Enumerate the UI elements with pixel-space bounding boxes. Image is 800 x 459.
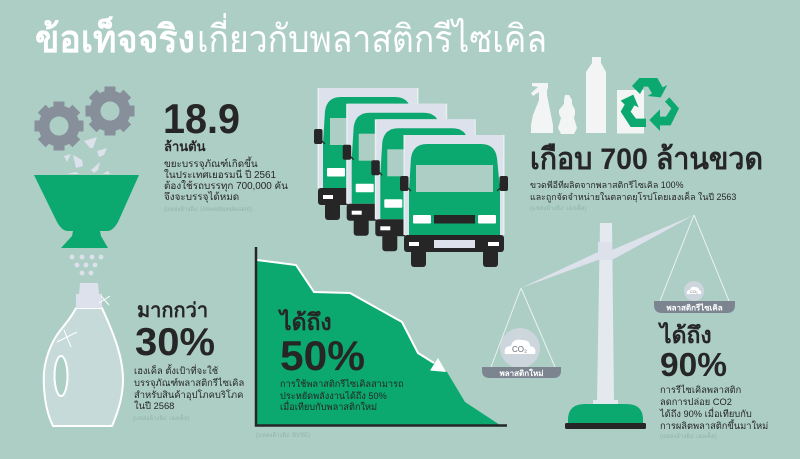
stat: up to 50%: เมื่อเทียบกับพลาสติกใหม่ xyxy=(280,400,377,412)
stat: up to 90%: (แหล่งอ้างอิง: เฮงเค็ล) xyxy=(660,431,717,440)
icon: balance scale xyxy=(482,215,735,429)
right pan: recycled plastic: พลาสติกรีไซเคิล xyxy=(666,302,723,312)
stat: up to 50%: การใช้พลาสติกรีไซเคิลสามารถ xyxy=(280,379,404,389)
stat: 18.9 million tons: ต้องใช้รถบรรทุก 700,000 คัน xyxy=(164,180,288,192)
left pan: new plastic: พลาสติกใหม่ xyxy=(499,368,544,378)
stat: up to 90%: ได้ถึง 90% เมื่อเทียบกับ xyxy=(659,407,752,419)
icon: falling pellets xyxy=(70,255,103,275)
icon: plastic flakes xyxy=(64,137,110,174)
stat: more than 30% xyxy=(133,300,244,422)
stat: more than 30%: มากกว่า xyxy=(137,300,208,322)
right pan: recycled plastic: CO₂ xyxy=(690,289,698,294)
stat: up to 50%: ประหยัดพลังงานได้ถึง 50% xyxy=(280,391,387,401)
stat: nearly 700 million bottles: เกือบ 700 ล้านขวด xyxy=(530,143,763,176)
stat: 18.9 million tons: 18.9 xyxy=(163,95,240,142)
stat: up to 50% xyxy=(277,308,404,412)
title: เกี่ยวกับพลาสติกรีไซเคิล xyxy=(197,13,547,61)
icon: green funnel xyxy=(34,175,139,248)
stat: up to 90% xyxy=(657,321,768,440)
stat: 18.9 million tons: ล้านตัน xyxy=(164,139,206,154)
stat: up to 90%: ลดการปล่อย CO2 xyxy=(660,397,732,407)
chart: falling energy use area xyxy=(256,247,507,426)
stat: more than 30%: (แหล่งอ้างอิง: เฮงเค็ล) xyxy=(133,413,190,422)
stat: up to 50%: ได้ถึง xyxy=(277,308,332,335)
scale base xyxy=(568,404,643,423)
stat: 18.9 million tons: จึงจะบรรจุได้หมด xyxy=(164,191,239,203)
stat: more than 30%: บรรจุภัณฑ์พลาสติกรีไซเคิล xyxy=(134,377,244,389)
icon: row of trucks xyxy=(314,88,508,267)
stat: 18.9 million tons: (แหล่งอ้างอิง: Umweltbundesamt) xyxy=(164,206,252,213)
stat: up to 90%: ได้ถึง xyxy=(657,321,712,348)
stat: up to 90%: การผลิตพลาสติกขึ้นมาใหม่ xyxy=(660,419,768,431)
stat: 18.9 million tons: ในประเทศเยอรมนี ปี 2561 xyxy=(164,169,276,181)
left pan: new plastic xyxy=(482,288,561,378)
stat: nearly 700 million bottles xyxy=(530,143,763,212)
stat: nearly 700 million bottles: และถูกจัดจำหน่ายในตลาดยุโรปโดยเฮงเค็ล ในปี 2563 xyxy=(530,191,736,203)
arrow head xyxy=(430,358,446,372)
stat: more than 30%: ในปี 2568 xyxy=(134,400,174,411)
scale beam xyxy=(521,215,694,288)
stat: up to 50%: 50% xyxy=(280,332,365,379)
right pan: recycled plastic xyxy=(654,215,735,313)
stat: more than 30%: 30% xyxy=(135,321,215,364)
title xyxy=(35,13,547,61)
icon: plastic bottles and recycling symbol xyxy=(531,57,679,134)
icon: gears xyxy=(34,86,134,150)
stat: nearly 700 million bottles: (แหล่งอ้างอิง: เฮงเค็ล) xyxy=(530,203,587,212)
stat: 18.9 million tons: ขยะบรรจุภัณฑ์เกิดขึ้น xyxy=(164,156,258,170)
scale post xyxy=(593,223,618,404)
stat: 18.9 million tons xyxy=(163,95,288,213)
stat: nearly 700 million bottles: ขวดพีอีทีผลิตจากพลาสติกรีไซเคิล 100% xyxy=(530,180,684,190)
recycling arrows xyxy=(621,78,679,131)
stat: up to 90%: การรีไซเคิลพลาสติก xyxy=(660,384,741,395)
stat: up to 90%: 90% xyxy=(660,346,727,383)
left pan: new plastic: CO₂ xyxy=(512,345,527,354)
stat: more than 30%: สำหรับสินค้าอุปโภคบริโภค xyxy=(134,389,243,401)
title: ข้อเท็จจริง xyxy=(35,16,195,61)
stat: more than 30%: เฮงเค็ล ตั้งเป้าที่จะใช้ xyxy=(134,364,218,376)
source: BVSE: (แหล่งอ้างอิง: BVSE) xyxy=(256,432,310,439)
icon: detergent bottle xyxy=(44,283,123,426)
